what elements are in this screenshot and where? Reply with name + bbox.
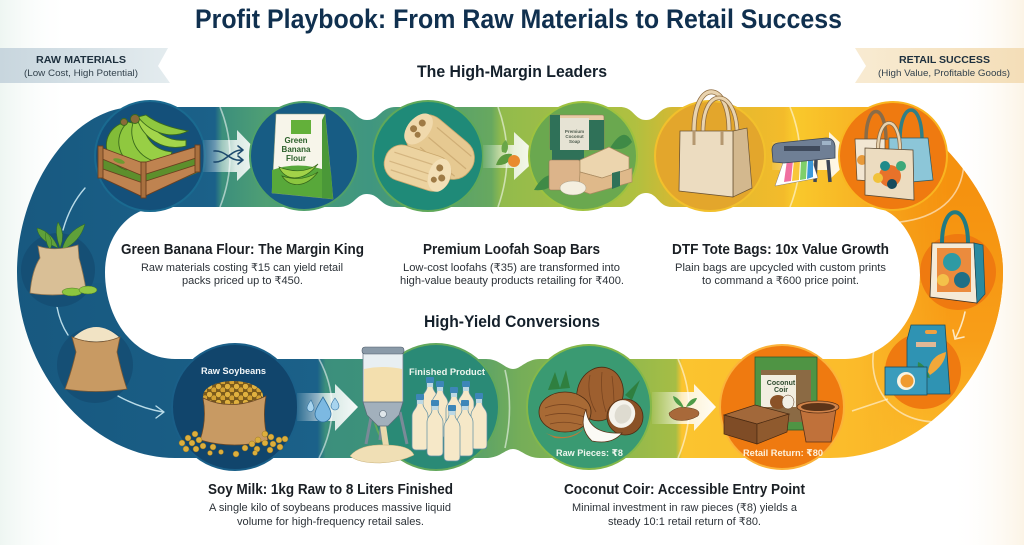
card: soy milk: volume for high-frequency retail sales. <box>237 516 424 528</box>
card: green banana flour <box>121 241 364 287</box>
step: premium soap bars <box>529 102 637 210</box>
ribbon: retail success <box>855 48 1024 83</box>
flow arrow lines <box>57 188 164 418</box>
step: green banana flour pack: Green <box>284 136 308 145</box>
step: finished product <box>350 344 499 470</box>
card: soy milk <box>208 481 453 528</box>
step: raw coconuts: Raw Pieces: ₹8 <box>556 448 623 459</box>
step: raw soybeans: Raw Soybeans <box>201 366 266 377</box>
step: printed tote bags <box>839 102 947 210</box>
step: green banana flour pack <box>250 102 358 210</box>
step: coconut coir products <box>720 345 844 469</box>
step: plain tote bag <box>655 92 765 211</box>
step: finished product: Finished Product <box>409 367 486 378</box>
card: DTF tote bags <box>672 241 889 287</box>
ribbon: retail success: RETAIL SUCCESS <box>899 54 990 66</box>
card: premium loofah soap: Premium Loofah Soap Bars <box>423 241 600 258</box>
flow arrow right <box>953 312 965 339</box>
card: DTF tote bags: Plain bags are upcycled with custom prints <box>675 262 887 274</box>
step: green bananas in crate <box>95 101 205 211</box>
arrow: soybeans to milk <box>297 384 358 431</box>
step: sack of leaves <box>21 222 97 307</box>
milk bottles <box>412 377 487 461</box>
card: DTF tote bags: DTF Tote Bags: 10x Value Growth <box>672 241 889 258</box>
ribbon: raw materials <box>0 48 170 83</box>
step: retail packaging <box>885 325 961 409</box>
arrow and printer: DTF printing <box>772 132 854 186</box>
ribbon: raw materials: (Low Cost, High Potential) <box>24 68 138 79</box>
step: premium soap bars: Coconut <box>565 134 584 139</box>
card: soy milk: A single kilo of soybeans produces massive liquid <box>209 502 451 514</box>
card: premium loofah soap: Low-cost loofahs (₹35) are transformed into <box>403 262 620 274</box>
ribbon: raw materials: RAW MATERIALS <box>36 54 126 66</box>
step: sack of flour <box>57 327 133 403</box>
card: green banana flour: Raw materials costing ₹15 can yield retail <box>141 262 343 274</box>
arrow: loofah to soap <box>483 132 540 180</box>
step: green banana flour pack: Flour <box>286 154 306 163</box>
step: raw loofahs <box>373 101 483 211</box>
heading: high-yield conversions: High-Yield Conversions <box>424 313 600 331</box>
card: coconut coir: Minimal investment in raw pieces (₹8) yields a <box>572 502 797 514</box>
step: tote on the right arc <box>920 212 996 310</box>
arrow: coconut to coir <box>652 384 716 431</box>
card: coconut coir: Coconut Coir: Accessible Entry Point <box>564 481 805 498</box>
soy milk tank <box>350 347 414 463</box>
card: green banana flour: packs priced up to ₹450. <box>182 275 303 287</box>
title: Profit Playbook: From Raw Materials to Retail Success <box>195 4 842 34</box>
step: coconut coir products: Coir <box>774 387 788 394</box>
card: premium loofah soap: high-value beauty products retailing for ₹400. <box>400 275 624 287</box>
step: coconut coir products: Coconut <box>767 380 796 387</box>
card: green banana flour: Green Banana Flour: The Margin King <box>121 241 364 258</box>
card: coconut coir <box>564 481 805 528</box>
step: coconut coir products: Retail Return: ₹80 <box>743 448 823 459</box>
step: green banana flour pack: Banana <box>282 145 311 154</box>
step: raw coconuts <box>527 345 651 469</box>
arrow: banana to flour <box>203 130 262 181</box>
step: premium soap bars: Premium <box>565 129 584 134</box>
heading: high-margin leaders: The High-Margin Leaders <box>417 63 607 81</box>
card: premium loofah soap <box>400 241 624 287</box>
process band <box>17 107 1003 458</box>
ribbon: retail success: (High Value, Profitable Goods) <box>878 68 1010 79</box>
card: coconut coir: steady 10:1 retail return of ₹80. <box>608 516 761 528</box>
step: raw soybeans <box>172 344 298 470</box>
card: soy milk: Soy Milk: 1kg Raw to 8 Liters Finished <box>208 481 453 498</box>
card: DTF tote bags: to command a ₹600 price point. <box>702 275 859 287</box>
step: premium soap bars: Soap <box>569 139 580 144</box>
